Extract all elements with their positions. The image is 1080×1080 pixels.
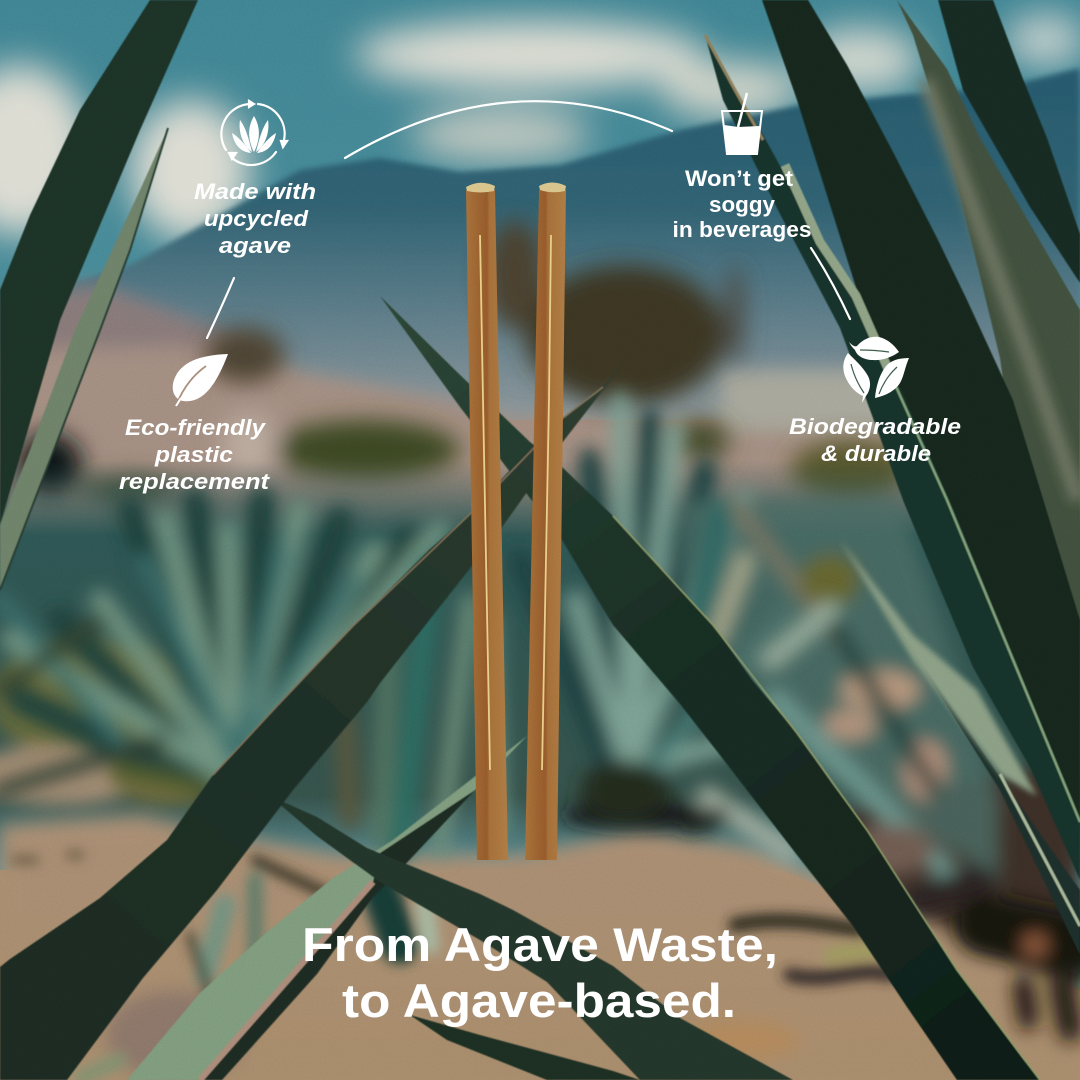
leaf: right thin with light edge bbox=[705, 35, 1080, 880]
title: From Agave Waste, bbox=[302, 918, 778, 971]
label: eco-friendly plastic replacement: replacement bbox=[119, 469, 271, 494]
leaf: lower right pale bbox=[840, 540, 1080, 955]
label: won't get soggy: in beverages bbox=[672, 217, 812, 242]
ground bbox=[0, 640, 1080, 1080]
leaf: bottom centre bbox=[270, 796, 793, 1080]
distant land strip bbox=[0, 285, 1080, 560]
leaf: right large dark bbox=[762, 0, 1080, 833]
label: won't get soggy: Won’t get bbox=[685, 166, 794, 191]
distant trees and shrubs bbox=[18, 220, 910, 504]
leaf: thin left bbox=[0, 128, 168, 590]
icon: three leaves bbox=[843, 337, 909, 403]
leaf: crossing right to left bbox=[0, 359, 627, 1080]
clouds bbox=[0, 14, 1080, 240]
label: made with upcycled agave: upcycled bbox=[204, 206, 309, 231]
connector arrow: right bbox=[811, 248, 850, 319]
connector arrow: left bbox=[207, 278, 234, 338]
centre agave rosette bbox=[345, 400, 790, 852]
label: biodegradable and durable: Biodegradable bbox=[789, 414, 961, 439]
title bbox=[302, 918, 778, 1027]
label: eco-friendly plastic replacement: Eco-friendly bbox=[125, 415, 267, 440]
straw: left bbox=[466, 183, 508, 860]
leaf: far right dark bbox=[938, 0, 1080, 283]
label: eco-friendly plastic replacement bbox=[119, 415, 271, 494]
label: biodegradable and durable bbox=[789, 414, 961, 466]
label: made with upcycled agave: Made with bbox=[194, 179, 316, 204]
leaf: light green lower left bbox=[127, 736, 527, 1080]
left agave rosette bbox=[0, 500, 440, 800]
straws bbox=[466, 182, 566, 860]
straw: right bbox=[525, 182, 566, 860]
label: won't get soggy bbox=[672, 166, 812, 242]
icon: upcycled agave bbox=[221, 101, 287, 165]
label: made with upcycled agave: agave bbox=[219, 233, 291, 258]
label: won't get soggy: soggy bbox=[709, 192, 776, 217]
icon: glass with straw bbox=[722, 93, 762, 155]
mountains bbox=[0, 68, 1080, 480]
label: made with upcycled agave bbox=[194, 179, 316, 258]
leaf: bottom small bbox=[410, 1015, 640, 1080]
field base bbox=[0, 460, 1080, 880]
ground shadows and lower blades bbox=[15, 855, 890, 1078]
title: to Agave-based. bbox=[342, 974, 736, 1027]
leaf: top left bbox=[0, 0, 198, 525]
right agave rosette bbox=[680, 500, 1080, 1030]
connector arrow: top arc bbox=[345, 101, 672, 158]
label: biodegradable and durable: & durable bbox=[821, 441, 931, 466]
label: eco-friendly plastic replacement: plastic bbox=[154, 442, 233, 467]
leaf: right olive bbox=[897, 0, 1080, 640]
leaf: crossing left to right bbox=[380, 296, 1040, 1080]
icon: leaf bbox=[173, 354, 228, 406]
